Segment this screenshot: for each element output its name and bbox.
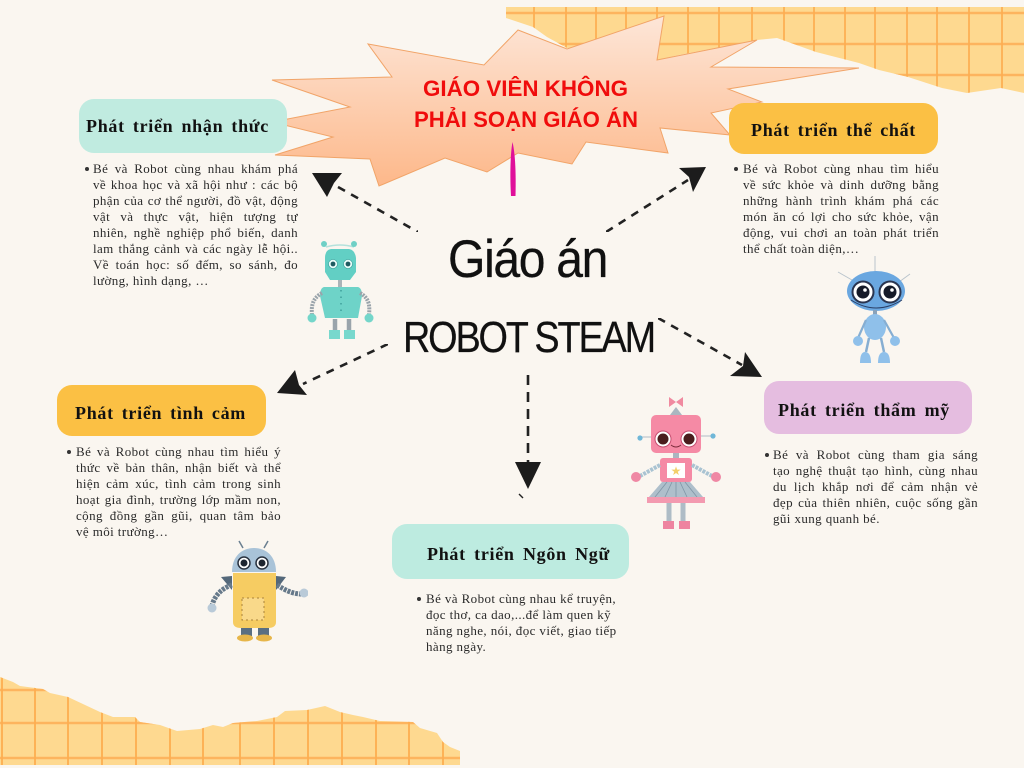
- bullet text: [734, 161, 939, 256]
- bullet text: Bé và Robot cùng nhau tìm hiểu ý: [76, 444, 281, 459]
- heading box: Phát triển tình cảm: [75, 403, 246, 423]
- bullet text: đọc thơ, ca dao,...để làm quen kỹ: [426, 607, 611, 622]
- icon: pink robot: [631, 397, 721, 529]
- bullet text: vệ môi trường…: [76, 524, 168, 539]
- icon: yellow robot: [208, 540, 308, 642]
- heading box: [392, 524, 629, 579]
- callout text: PHẢI SOẠN GIÁO ÁN: [414, 107, 638, 132]
- heading box: [57, 385, 266, 436]
- arrow: to language panel: [515, 375, 541, 498]
- bullet text: năng nghe, nói, đọc viết, giao tiếp: [426, 623, 617, 638]
- panel: Phát triển Ngôn Ngữ: [392, 524, 629, 654]
- arrow: to cognitive panel: [312, 173, 418, 232]
- bullet text: về khoa học và xã hội như : các bộ: [93, 177, 298, 192]
- bullet text: [417, 591, 617, 654]
- bullet text: Bé và Robot cùng tham gia sáng: [773, 447, 978, 462]
- central title: ROBOT STEAM: [403, 313, 654, 362]
- bullet text: [765, 447, 978, 526]
- torn grid paper: bottom left: [0, 677, 460, 765]
- starburst shape: [272, 16, 859, 186]
- heading box: [729, 103, 938, 154]
- bullet text: phận của cơ thể người, đồ vật, động: [93, 193, 298, 208]
- heading box: Phát triển thể chất: [751, 120, 916, 140]
- bullet text: hoạt gia đình, trường lớp mầm non,: [76, 492, 281, 507]
- heading box: Phát triển Ngôn Ngữ: [427, 544, 610, 564]
- bullet text: những hành trình khám phá các: [743, 193, 939, 208]
- bullet text: động, vui chơi an toàn phát triển: [743, 225, 939, 240]
- bullet text: lường, hình dạng, …: [93, 273, 209, 288]
- bullet text: món ăn có lợi cho sức khỏe, vận: [743, 209, 939, 224]
- bullet text: tạo nghệ thuật tạo hình, cùng nhau: [773, 463, 978, 478]
- bullet text: du lịch khắp nơi để cảm nhận vẻ: [773, 479, 978, 494]
- callout text: GIÁO VIÊN KHÔNG: [423, 76, 628, 101]
- bullet text: hàng ngày.: [426, 639, 486, 654]
- bullet text: gũi xung quanh bé.: [773, 511, 880, 526]
- panel: Phát triển nhận thức: [79, 99, 298, 288]
- icon: blue robot: [838, 256, 910, 363]
- panel: Phát triển thẩm mỹ: [764, 381, 978, 526]
- bullet text: nhiên, nghề nghiệp phổ biến, danh: [93, 225, 298, 240]
- arrow: to physical panel: [606, 167, 706, 232]
- bullet text: Bé và Robot cùng nhau kể truyện,: [426, 591, 616, 606]
- bullet text: Bé và Robot cùng nhau tìm hiểu: [743, 161, 939, 176]
- magenta mark: [510, 142, 516, 196]
- callout text: [414, 76, 638, 132]
- heading box: [764, 381, 972, 434]
- bullet text: cộng đồng gần gũi, quan tâm bảo: [76, 508, 281, 523]
- arrow: to aesthetic panel: [658, 318, 762, 377]
- bullet text: về sức khỏe và dinh dưỡng bằng: [743, 177, 939, 192]
- bullet text: hiện cảm xúc, tình cảm trong sinh: [76, 476, 281, 491]
- bullet text: [67, 444, 281, 539]
- bullet text: Bé và Robot cùng nhau khám phá: [93, 161, 298, 176]
- panel: Phát triển thể chất: [729, 103, 939, 256]
- bullet text: đẹp của thiên nhiên, cuộc sống gần: [773, 495, 978, 510]
- icon: teal robot: [308, 241, 374, 339]
- bullet text: lam thắng cảnh và các ngày lễ hội..: [93, 241, 298, 256]
- bullet text: thức về bản thân, nhận biết và thể: [76, 460, 281, 475]
- icon: pink robot: ★: [671, 464, 681, 478]
- heading box: [79, 99, 287, 153]
- heading box: Phát triển nhận thức: [86, 116, 269, 136]
- torn grid paper: top right: [506, 7, 1024, 93]
- central title: Giáo án: [448, 230, 607, 289]
- bullet text: thể chất toàn diện,…: [743, 241, 859, 256]
- arrow: to emotion panel: [277, 344, 388, 395]
- bullet text: Về toán học: số đếm, so sánh, đo: [93, 257, 298, 272]
- bullet text: [85, 161, 298, 288]
- bullet text: vật và thực vật, hiện tượng tự: [93, 209, 298, 224]
- heading box: Phát triển thẩm mỹ: [778, 400, 950, 420]
- panel: Phát triển tình cảm: [57, 385, 281, 539]
